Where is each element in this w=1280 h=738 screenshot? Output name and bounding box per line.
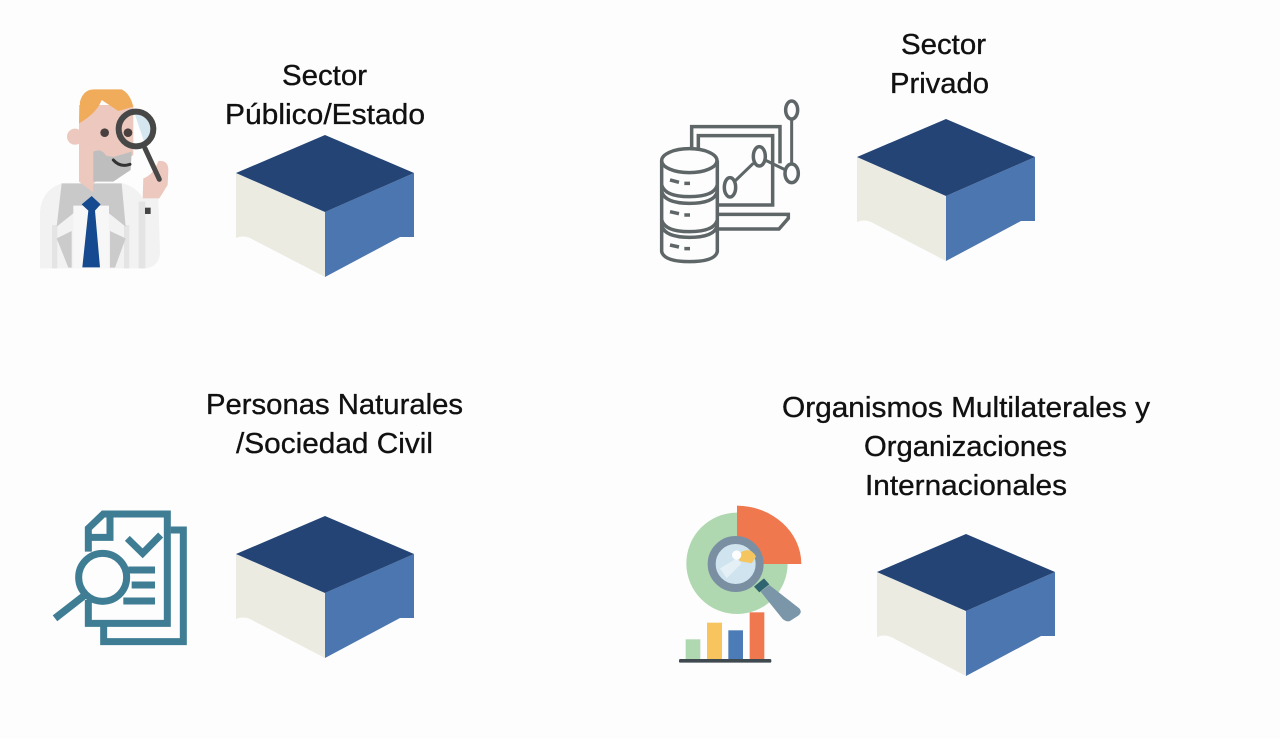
cube: privado — [857, 119, 1035, 261]
panel: sector público — [40, 60, 425, 277]
panel: organismos multilaterales — [679, 392, 1151, 676]
heading: Sector Privado: Sector — [901, 29, 986, 61]
heading: Sector Privado — [890, 29, 989, 100]
heading: Organismos Multilaterales y Organizaciones Internacionales — [782, 392, 1151, 502]
heading: Personas Naturales / Sociedad Civil — [206, 389, 463, 460]
panel: personas naturales — [55, 389, 463, 658]
heading: Sector Público/Estado — [225, 60, 425, 131]
heading: Organismos Multilaterales y Organizaciones Internacionales: Internacionales — [865, 470, 1067, 502]
heading: Sector Privado: Privado — [890, 68, 989, 100]
heading: Organismos Multilaterales y Organizaciones Internacionales: Organismos Multilaterales y — [782, 392, 1151, 424]
cube: público — [236, 135, 414, 277]
icon: documents with magnifier — [55, 514, 183, 642]
icon: man with magnifying glass — [40, 89, 168, 268]
cube: organismos — [877, 534, 1055, 676]
heading: Personas Naturales / Sociedad Civil: /Sociedad Civil — [236, 428, 433, 460]
icon: pie chart, magnifier and bars — [679, 506, 801, 663]
heading: Personas Naturales / Sociedad Civil: Personas Naturales — [206, 389, 463, 421]
heading: Organismos Multilaterales y Organizaciones Internacionales: Organizaciones — [864, 431, 1067, 463]
heading: Sector Público/Estado: Público/Estado — [225, 99, 425, 131]
heading: Sector Público/Estado: Sector — [282, 60, 367, 92]
panel: sector privado — [662, 29, 1035, 262]
icon: database and laptop chart — [662, 101, 798, 262]
cube: personas — [236, 516, 414, 658]
